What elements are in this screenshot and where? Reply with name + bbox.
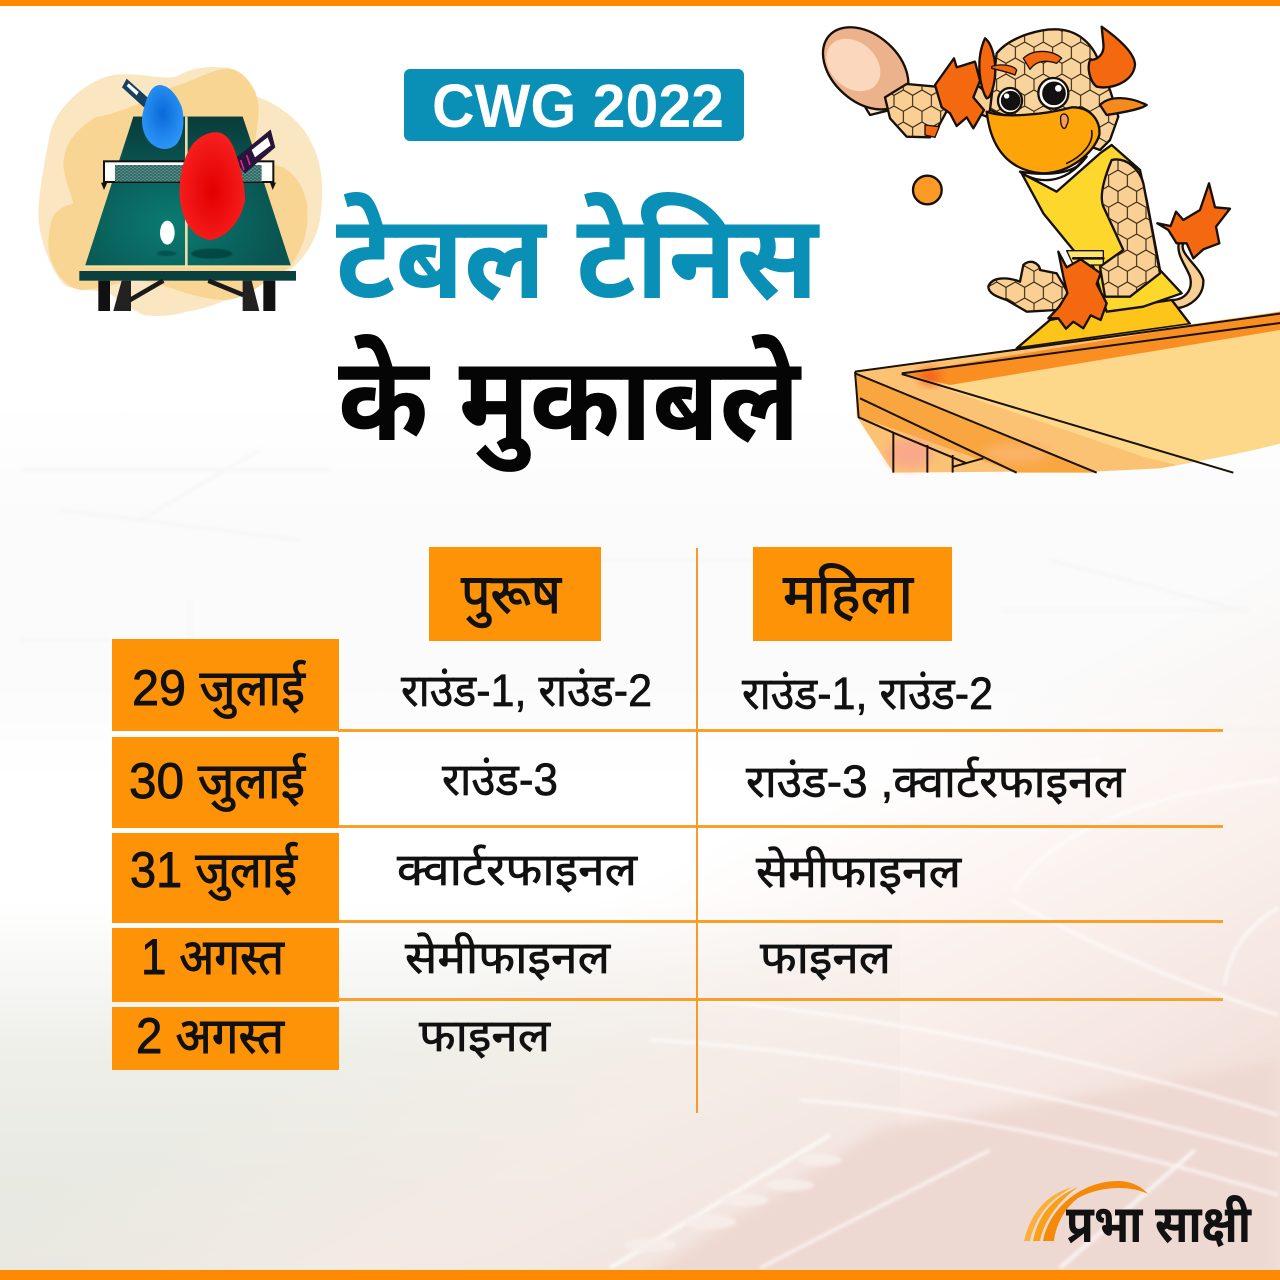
shorts: [1017, 300, 1190, 348]
row: 1 August: फाइनल: [760, 932, 893, 983]
header: men: [429, 547, 601, 641]
right horn: [1089, 27, 1135, 87]
upper hand: [885, 84, 947, 137]
upper arm link: [970, 82, 995, 117]
eyes: [998, 78, 1068, 113]
row: 2 August: 2 अगस्त: [136, 1008, 285, 1064]
logo: Prabha Sakshi: [1024, 1181, 1252, 1254]
row: 29 July: राउंड-1, राउंड-2: [401, 665, 652, 716]
row lines: [338, 729, 1223, 1001]
top border: [0, 0, 1280, 6]
shirt text band: [1067, 251, 1103, 265]
ball: [913, 176, 942, 204]
far arm: [1100, 159, 1160, 297]
row: 29 July: 29 जुलाई: [132, 660, 306, 719]
row: 31 July: 31 जुलाई: [130, 842, 298, 901]
row: 31 July: क्वार्टरफाइनल: [397, 844, 639, 895]
tail: [1157, 183, 1230, 308]
row: 31 July: [112, 833, 963, 923]
upper wrist fur: [935, 58, 984, 128]
row: 1 August: [112, 928, 893, 1002]
header: women: [753, 547, 952, 641]
row: 30 July: [112, 737, 1127, 828]
row: 2 August: फाइनल: [419, 1010, 552, 1061]
badge: CWG 2022: CWG 2022: [432, 72, 724, 140]
lower hand: [988, 262, 1068, 312]
header: men: पुरूष: [461, 563, 562, 628]
brows: [992, 51, 1062, 75]
left ear: [979, 38, 995, 98]
schedule table: [112, 547, 1223, 1113]
bottom border: [0, 1270, 1280, 1280]
row: 2 August: [112, 1007, 552, 1070]
row: 30 July: राउंड-3 ,क्वार्टरफाइनल: [746, 756, 1127, 807]
mascot: bull with paddle at table: [807, 11, 1230, 348]
title line 2: के मुकाबले: [338, 333, 802, 472]
shirt: [1022, 145, 1182, 312]
column divider: [696, 548, 698, 1113]
icon: table tennis table with paddles: [38, 67, 322, 316]
table corner in foreground: [855, 312, 1280, 473]
header: women: महिला: [783, 563, 915, 625]
row: 29 July: राउंड-1, राउंड-2: [742, 668, 993, 719]
row: 29 July: [112, 639, 993, 731]
title line 1: टेबल टेनिस: [336, 191, 820, 324]
muzzle: [987, 107, 1099, 180]
lower wrist fur: [1048, 252, 1107, 329]
row: 31 July: सेमीफाइनल: [756, 846, 963, 897]
row: 1 August: सेमीफाइनल: [405, 932, 612, 983]
row: 30 July: राउंड-3: [442, 754, 558, 805]
paddle: [807, 11, 924, 126]
logo: Prabha Sakshi: प्रभा साक्षी: [1066, 1196, 1252, 1254]
right ear: [1100, 98, 1147, 115]
head: [990, 29, 1118, 150]
row: 30 July: 30 जुलाई: [129, 753, 306, 812]
row: 1 August: 1 अगस्त: [141, 929, 285, 985]
